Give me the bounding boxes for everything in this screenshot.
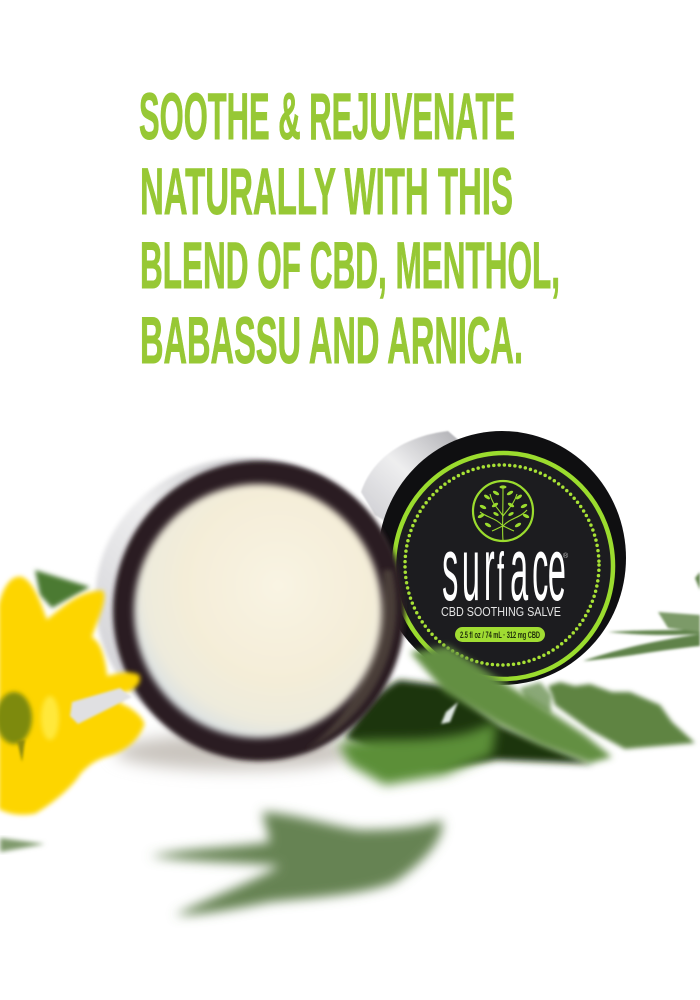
brand name: a bbox=[510, 520, 528, 620]
jar side bbox=[361, 431, 470, 530]
size pill bbox=[455, 627, 545, 642]
centre stem bbox=[17, 740, 25, 762]
brand name: f bbox=[497, 539, 504, 615]
leaf cluster at jar base bbox=[338, 646, 695, 785]
brand name: r bbox=[484, 520, 495, 620]
closed jar with label bbox=[361, 431, 626, 685]
blurred foreground leaf bbox=[150, 812, 442, 915]
flower bbox=[0, 570, 143, 813]
brand name: s bbox=[442, 520, 458, 620]
size pill: 2.5 fl oz / 74 mL · 312 mg CBD bbox=[460, 630, 540, 641]
lower left leaf bbox=[338, 722, 497, 785]
brand name: u bbox=[462, 520, 480, 620]
flower leaf bbox=[35, 570, 90, 608]
jar side bbox=[95, 458, 397, 742]
dark leaf mass bbox=[345, 680, 592, 768]
small bud bbox=[520, 682, 552, 715]
brand name: e bbox=[548, 520, 566, 620]
heading bbox=[139, 79, 560, 377]
flower centre bbox=[0, 692, 32, 744]
green ring bbox=[394, 453, 613, 679]
jar lid bbox=[378, 431, 626, 685]
rim highlight bbox=[305, 570, 396, 750]
petals bbox=[0, 578, 143, 813]
icon: tree logo bbox=[473, 481, 533, 541]
jar rim bbox=[113, 461, 405, 761]
open jar with salve bbox=[95, 458, 405, 761]
petal highlight bbox=[41, 696, 59, 740]
grey strip bbox=[70, 688, 132, 724]
dotted ring bbox=[405, 465, 599, 665]
background leaf: upper right bbox=[583, 572, 700, 661]
front leaf blade bbox=[410, 646, 612, 763]
table shadow under jar bbox=[115, 734, 355, 770]
registered mark: ® bbox=[563, 552, 569, 560]
product name: CBD SOOTHING SALVE bbox=[441, 604, 561, 619]
white stem highlight bbox=[441, 702, 458, 724]
far left blurred leaf bbox=[0, 838, 45, 852]
brand name: c bbox=[532, 520, 548, 620]
right leaf bbox=[548, 682, 695, 749]
salve surface bbox=[134, 484, 382, 738]
